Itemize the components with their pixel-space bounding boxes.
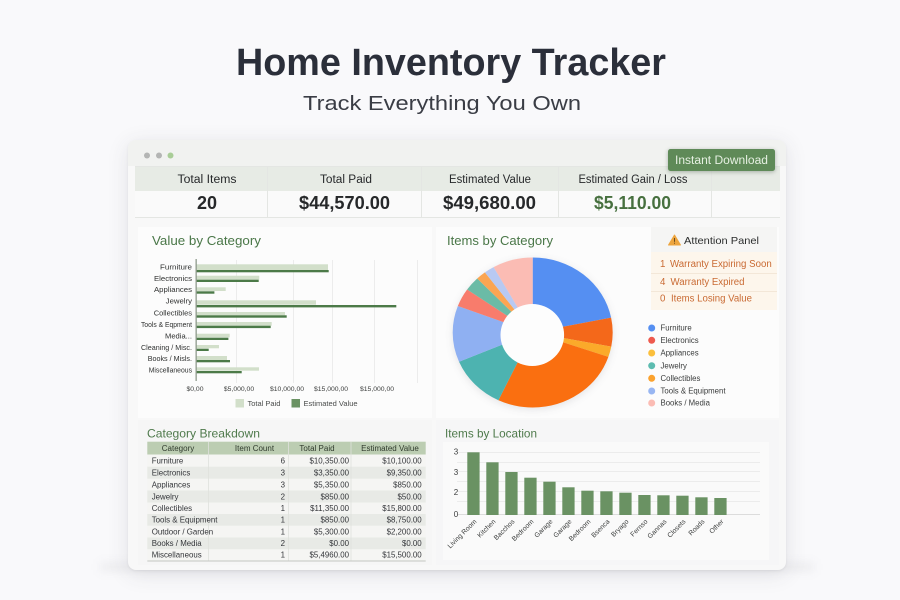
table: category breakdown: $850.00 <box>393 480 422 489</box>
y axis labels: 3 <box>454 468 459 477</box>
KPI: total paid <box>299 174 390 213</box>
category axis labels: Collectibles <box>154 309 192 318</box>
alert rows: 0 <box>660 294 666 304</box>
table: category breakdown: 1 <box>281 504 285 513</box>
table: category breakdown: 2 <box>281 492 285 501</box>
table: category breakdown: $850.00 <box>320 516 350 525</box>
table: category breakdown: Jewelry <box>152 492 179 501</box>
KPI: estimated value: $49,680.00 <box>443 193 536 213</box>
icon: warning triangle <box>668 235 680 245</box>
x axis labels: Garage <box>552 518 574 539</box>
KPI: total items: Total Items <box>178 174 237 186</box>
table: category breakdown: $15,800.00 <box>382 504 422 513</box>
KPI: total items <box>178 174 237 213</box>
legend: donut chart: Jewelry <box>660 361 687 370</box>
value axis labels: $10,000,00 <box>270 386 304 393</box>
x axis labels: Bryago <box>610 518 631 539</box>
KPI: estimated gain or loss: Estimated Gain / Loss <box>578 174 688 186</box>
window title bar <box>128 140 786 166</box>
heading: items by location: Items by Location <box>445 426 537 440</box>
y axis labels: 0 <box>454 510 459 519</box>
table: category breakdown: $9,350.00 <box>387 468 422 477</box>
table: category breakdown: Collectibles <box>152 504 192 513</box>
donut hole <box>500 304 564 366</box>
x axis labels: Fernso <box>630 518 650 538</box>
heading: items by category: Items by Category <box>447 233 553 248</box>
panel: attention panel <box>651 227 777 310</box>
legend: donut chart: Collectibles <box>660 374 700 383</box>
table: category breakdown: $3,350.00 <box>314 468 350 477</box>
legend: donut chart: Appliances <box>660 349 699 358</box>
panel: category breakdown <box>138 420 432 565</box>
category axis labels: Cleaning / Misc. <box>141 343 192 352</box>
category axis labels: Media... <box>165 332 192 341</box>
category axis labels <box>141 262 193 374</box>
KPI: estimated value <box>443 174 536 213</box>
table: category breakdown: 6 <box>281 456 286 465</box>
alert rows: Warranty Expired <box>670 277 744 288</box>
x axis labels: Bsenca <box>590 518 612 539</box>
donut chart: items by category <box>493 295 573 370</box>
table: category breakdown: $5,350.00 <box>314 480 350 489</box>
value axis labels: $0,00 <box>186 386 204 393</box>
alert rows <box>660 259 772 304</box>
table: category breakdown: $11,350.00 <box>310 504 350 513</box>
legend: bar chart: Estimated Value <box>304 399 358 408</box>
value axis labels: $15,000,00 <box>314 386 348 393</box>
table: category breakdown: Miscellaneous <box>152 550 202 559</box>
table: category breakdown: Books / Media <box>152 539 202 548</box>
table: category breakdown: $2,200.00 <box>387 527 422 536</box>
table: category breakdown: $0.00 <box>329 539 350 548</box>
legend: bar chart <box>236 399 358 408</box>
KPI strip <box>135 166 780 218</box>
y axis labels <box>454 448 459 519</box>
table: category breakdown: Item Count <box>235 444 275 453</box>
x axis labels: Living Room <box>447 518 479 550</box>
table: category breakdown: Furniture <box>152 456 184 465</box>
table: category breakdown: $5,4960.00 <box>310 550 350 559</box>
legend: donut chart: Tools & Equipment <box>660 387 726 396</box>
category axis labels: Electronics <box>154 274 192 283</box>
bar chart: paid and estimated value <box>196 259 396 381</box>
table: category breakdown: Category <box>162 444 194 453</box>
x axis labels: Garage <box>533 518 555 539</box>
panel: items by location <box>436 420 779 565</box>
legend: donut chart: Books / Media <box>660 399 711 408</box>
value axis labels: $5,000,00 <box>224 386 254 393</box>
legend: bar chart: Total Paid <box>248 399 280 408</box>
table: category breakdown: $50.00 <box>398 492 422 501</box>
table: category breakdown: Appliances <box>152 480 190 489</box>
category axis labels: Books / Misls. <box>148 354 192 363</box>
category axis labels: Furniture <box>160 262 192 272</box>
y axis labels: 2 <box>454 488 459 497</box>
table: category breakdown: 2 <box>281 539 285 548</box>
table: category breakdown: $10,100.00 <box>382 456 422 465</box>
x axis labels <box>447 518 726 550</box>
category axis labels: Jewelry <box>166 297 192 306</box>
KPI: estimated gain or loss: $5,110.00 <box>594 193 671 213</box>
x axis labels: Bacchos <box>493 518 517 542</box>
table: category breakdown: 1 <box>281 527 285 536</box>
panel: value by category <box>138 227 432 418</box>
panel: items by category <box>436 227 779 418</box>
y axis labels: 3 <box>454 448 459 456</box>
title: Home Inventory Tracker <box>236 42 666 84</box>
table: category breakdown: Estimated Value <box>361 444 419 453</box>
legend: donut chart: Electronics <box>660 336 699 345</box>
table: category breakdown: 3 <box>281 480 286 489</box>
alert rows: 1 <box>660 259 665 270</box>
KPI: total items: 20 <box>197 193 217 213</box>
x axis labels: Roads <box>688 518 707 537</box>
x axis labels: Closets <box>666 518 688 539</box>
x axis labels: Kitchen <box>476 518 498 539</box>
subtitle: Track Everything You Own <box>303 92 581 115</box>
x axis labels: Other <box>708 518 726 535</box>
KPI: total paid: Total Paid <box>320 174 372 186</box>
table: category breakdown: $850.00 <box>320 492 350 501</box>
x axis labels: Bedroom <box>568 518 593 543</box>
alert rows: 4 <box>660 277 666 288</box>
KPI: estimated gain or loss <box>578 174 688 213</box>
table: category breakdown: 3 <box>281 468 286 477</box>
category axis labels: Tools & Eqpment <box>141 320 193 329</box>
alert rows: Warranty Expiring Soon <box>670 259 772 270</box>
table: category breakdown: $5,300.00 <box>314 527 350 536</box>
button: instant download: Instant Download <box>675 155 768 167</box>
legend: donut chart: Furniture <box>660 324 692 333</box>
heading: category breakdown: Category Breakdown <box>147 426 260 440</box>
table: category breakdown: Tools & Equipment <box>152 516 218 525</box>
x axis labels: Gannas <box>647 518 669 540</box>
x axis labels: Bedroom <box>511 518 536 543</box>
bar chart: items by location <box>467 452 727 515</box>
value axis labels <box>186 386 394 393</box>
table: category breakdown: Outdoor / Garden <box>152 527 213 536</box>
KPI: estimated value: Estimated Value <box>449 174 531 186</box>
value axis labels: $15,000,00 <box>360 386 394 393</box>
table: category breakdown: Total Paid <box>299 444 335 453</box>
legend: donut chart <box>648 324 726 408</box>
alert rows: Items Losing Value <box>671 294 752 304</box>
floor shadow under window <box>100 563 814 571</box>
table: category breakdown <box>147 442 426 562</box>
table: category breakdown: $10,350.00 <box>310 456 350 465</box>
table: category breakdown: $8,750.00 <box>387 516 422 525</box>
dashboard window card background <box>128 140 786 570</box>
table: category breakdown: $0.00 <box>402 539 422 548</box>
category axis labels: Appliances <box>154 285 192 294</box>
heading: value by category: Value by Category <box>152 233 262 248</box>
heading: attention panel: Attention Panel <box>684 235 759 247</box>
table: category breakdown: Electronics <box>152 468 190 477</box>
KPI: total paid: $44,570.00 <box>299 193 390 213</box>
button: instant download <box>668 149 775 171</box>
category axis labels: Miscellaneous <box>149 366 192 374</box>
table: category breakdown: 1 <box>281 516 285 525</box>
table: category breakdown: $15,500.00 <box>382 550 422 559</box>
table: category breakdown: 1 <box>281 550 285 559</box>
